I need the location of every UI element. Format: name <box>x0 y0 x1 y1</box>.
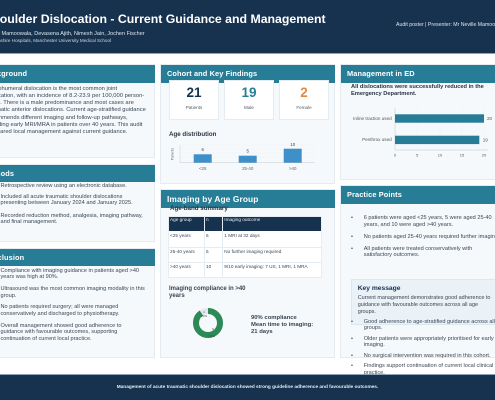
key message list <box>351 319 495 375</box>
bar chart: age distribution <box>170 142 315 171</box>
panel: conclusion: Overall management showed good adherence to <box>0 323 121 329</box>
key message list: imaging. <box>364 342 385 348</box>
stat card: patients: Patients <box>186 105 202 110</box>
management statement: Emergency Department. <box>351 91 416 97</box>
bar chart: management: 19 <box>483 137 488 142</box>
practice list: • <box>351 215 353 221</box>
bar chart: management <box>353 108 493 157</box>
bar chart: age distribution: 5 <box>246 148 249 154</box>
background heading <box>0 65 155 83</box>
table: age-band summary: >40 years <box>170 264 191 269</box>
age-band summary heading: Age-band summary <box>170 205 228 212</box>
bar chart: age distribution: >40 <box>289 166 297 171</box>
table: age-band summary: Imaging outcome <box>224 217 260 222</box>
conclusion list <box>0 268 139 280</box>
header band <box>0 0 495 54</box>
panel: conclusion: guidance with favourable outcomes, supporting <box>0 329 117 335</box>
key message text <box>358 295 490 315</box>
donut chart: compliance: 1 <box>203 310 205 314</box>
compliance stats: 90% compliance <box>251 315 297 321</box>
panel: conclusion <box>0 248 155 358</box>
stat card: male: 19 <box>241 85 257 100</box>
key message text: guidance with favourable outcomes across all age <box>358 302 478 308</box>
panel: conclusion: conservatively and discharged to physiotherapy. <box>0 311 120 317</box>
bar chart: age distribution: 10 <box>290 142 296 147</box>
panel: conclusion: continuation of current local practice. <box>0 336 92 342</box>
bar chart: management: Penthrox used <box>362 137 392 142</box>
practice heading <box>341 186 495 204</box>
age distribution heading: Age distribution <box>169 131 216 138</box>
panel: management in ED <box>340 64 495 180</box>
stat card: patients: 21 <box>186 85 202 100</box>
panel: practice points: • <box>351 246 353 252</box>
donut chart: compliance <box>193 308 223 338</box>
key message list: groups. <box>364 325 382 331</box>
key message list: No surgical intervention was required in this cohort. <box>364 353 491 359</box>
key message list: • <box>351 336 353 342</box>
key message list: • <box>351 363 353 369</box>
bar chart: management: 5 <box>416 152 419 157</box>
imaging heading <box>161 190 335 208</box>
table: age-band summary: 1 MRI at 32 days <box>224 233 260 238</box>
stat card: female: Female <box>296 105 312 110</box>
background text <box>0 86 146 135</box>
donut chart: compliance: 10% <box>201 314 208 318</box>
bar chart: management: 20 <box>487 116 493 121</box>
management heading: Management in ED <box>347 69 415 78</box>
stat card: male: Male <box>244 105 254 110</box>
bar chart: management: 10 <box>438 152 443 157</box>
compliance stats: Mean time to imaging: <box>251 322 313 328</box>
panel: practice points: 6 patients were aged <25 years, 5 were aged 25-40 <box>364 215 492 221</box>
panel: conclusion: No patients required surgery; all were managed <box>0 304 118 310</box>
panel: practice points: satisfactory outcomes. <box>364 252 419 258</box>
table: age-band summary: Age group <box>170 217 192 222</box>
panel: imaging by age group <box>160 189 335 358</box>
table: age-band summary: 10 <box>206 264 211 269</box>
conclusion list: Compliance with imaging guidance in patients aged >40 <box>0 268 139 274</box>
management statement: All dislocations were successfully reduced in the <box>351 84 484 90</box>
stat card: patients <box>169 80 219 120</box>
panel: practice points: • <box>351 234 353 240</box>
cohort heading <box>161 65 335 83</box>
table: age-band summary: No further imaging required <box>224 249 281 254</box>
practice heading: Practice Points <box>347 190 402 199</box>
key message text: groups. <box>358 309 376 315</box>
compliance heading: Imaging compliance in >40 <box>169 286 246 292</box>
panel: practice points: All patients were treated conservatively with <box>364 246 472 252</box>
key message list: Older patients were appropriately prioritised for early <box>364 336 494 342</box>
panel: methods: presenting between January 2024 and January 2025. <box>0 200 133 206</box>
methods list: Retrospective review using an electronic database. <box>0 182 127 188</box>
table: age-band summary: 9/10 early imaging: 7 US, 1 MRI, 1 MRA <box>224 264 308 269</box>
bar chart: management: 20 <box>482 152 487 157</box>
bar chart: management: 15 <box>460 152 465 157</box>
conclusion heading <box>0 249 155 266</box>
panel: practice points: years, and 10 were aged >40 years. <box>364 222 453 228</box>
footer band <box>0 374 495 400</box>
table: age-band summary: <25 years <box>170 233 191 238</box>
donut chart: compliance: 9 <box>212 327 214 331</box>
imaging heading: Imaging by Age Group <box>167 194 258 204</box>
panel: methods: and final management. <box>0 219 57 225</box>
key message list: Findings support continuation of current local clinical <box>364 363 493 369</box>
bar chart: management: Inline traction used <box>353 116 392 121</box>
panel: background <box>0 64 155 158</box>
table: age-band summary: 25-40 years <box>170 249 195 254</box>
callout: key message <box>351 279 495 325</box>
compliance heading <box>169 286 246 299</box>
management statement <box>351 84 484 97</box>
panel: conclusion: Ultrasound was the most common imaging modality in this <box>0 286 145 292</box>
table: age-band summary: 5 <box>206 249 209 254</box>
panel: practice points <box>340 185 495 358</box>
stat card: female <box>279 80 329 120</box>
panel: methods <box>0 164 155 242</box>
management heading <box>341 65 495 83</box>
panel: methods: Recorded reduction method, analgesia, imaging pathway, <box>0 213 143 219</box>
key message heading: Key message <box>358 285 400 292</box>
table: age-band summary <box>168 216 322 278</box>
key message text: Current management demonstrates good adherence to <box>358 295 490 301</box>
bar chart: age distribution: Patients <box>170 148 174 160</box>
methods heading <box>0 165 155 182</box>
stat card: female: 2 <box>300 85 308 100</box>
bar chart: age distribution: 6 <box>201 147 204 152</box>
compliance heading: years <box>169 293 185 299</box>
table: age-band summary: n <box>206 217 209 222</box>
stat card: male <box>224 80 274 120</box>
bar chart: age distribution: <25 <box>199 166 207 171</box>
panel: conclusion: group. <box>0 293 16 299</box>
footer text: Management of acute traumatic shoulder dislocation showed strong guideline adherence and favourable outcomes. <box>117 384 378 390</box>
cohort heading: Cohort and Key Findings <box>167 69 257 78</box>
table header row <box>169 217 321 231</box>
conclusion list: years was high at 90%. <box>0 274 58 280</box>
bar chart: age distribution: 25-40 <box>242 166 254 171</box>
bar chart: management: 0 <box>394 152 397 157</box>
panel: cohort and key findings <box>160 64 335 184</box>
key message list: • <box>351 353 353 359</box>
compliance stats: 21 days <box>251 329 273 335</box>
table: age-band summary: 6 <box>206 233 209 238</box>
donut chart: compliance: 90% <box>209 334 216 338</box>
compliance stats <box>251 315 313 335</box>
panel: methods: Included all acute traumatic shoulder dislocations <box>0 194 122 200</box>
key message list: • <box>351 319 353 325</box>
